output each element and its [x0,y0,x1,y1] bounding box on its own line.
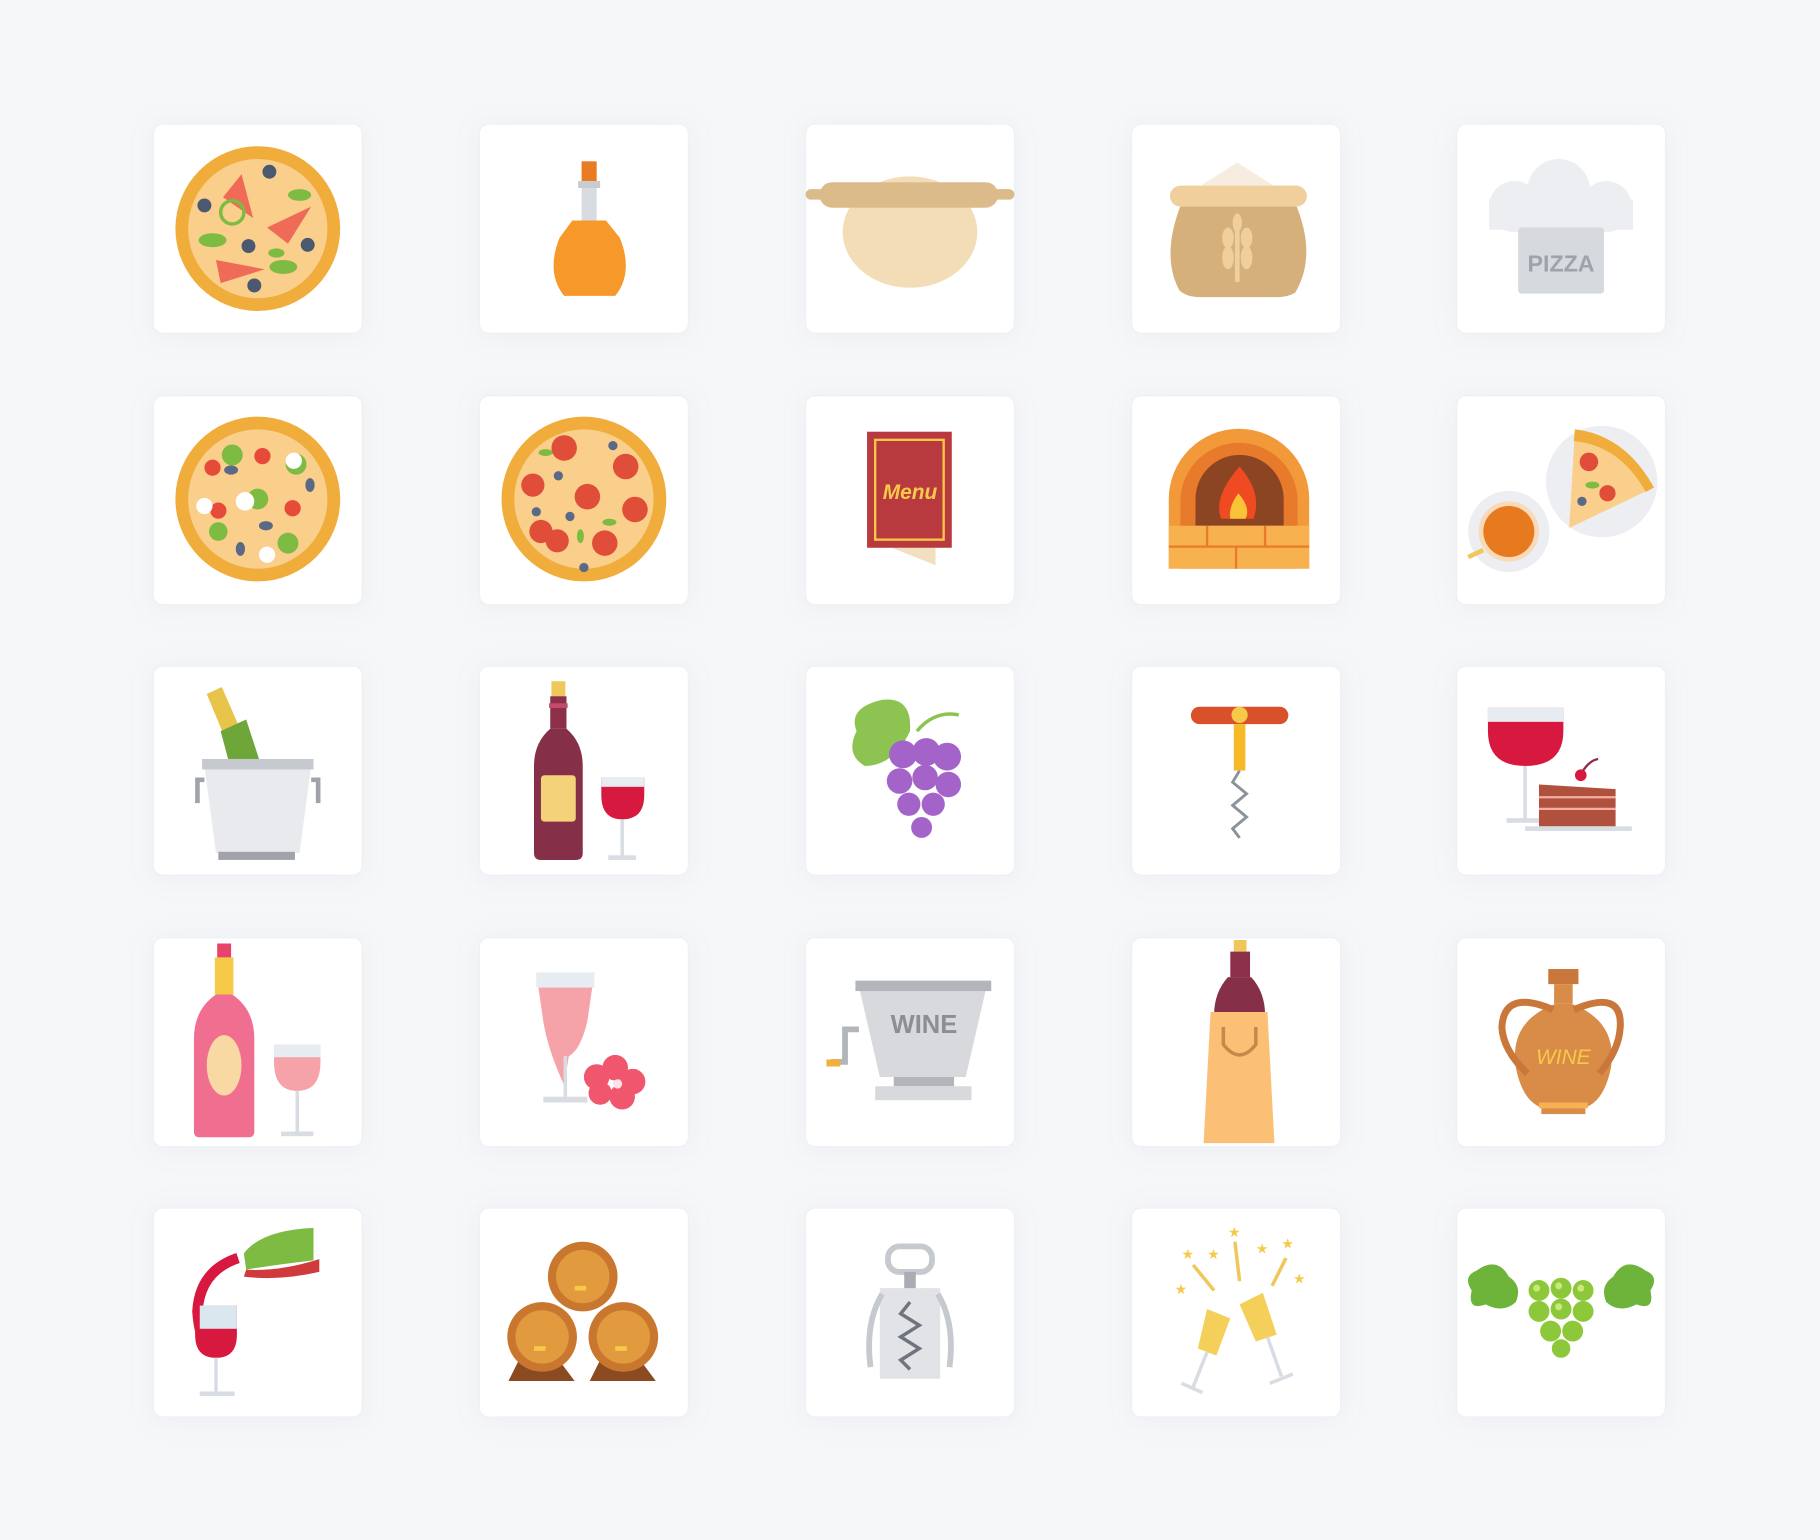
icon: rose wine glass and flower [536,973,645,1109]
icon: menu [867,432,952,565]
icon: mushroom pizza [175,417,340,581]
icon: toasting glasses [1175,1224,1305,1393]
icon: wine in paper bag [1204,940,1274,1143]
icon: wine bottle and glass [534,681,644,860]
icon: wine press [826,981,991,1100]
icon: pouring wine [195,1228,319,1396]
icon: grapes [852,699,961,838]
icon: toasting glasses: ★ [1182,1246,1194,1262]
icon: amphora [1502,969,1620,1114]
icon: rose bottle and glass [194,943,320,1137]
icon: menu: Menu [883,481,937,504]
icon: pizza oven [1169,429,1309,569]
icon: toasting glasses: ★ [1293,1271,1305,1287]
icon: oil bottle [554,161,626,296]
icon: dough and rolling pin [806,176,1014,288]
icon: chef hat: PIZZA [1528,251,1595,277]
icon: wing corkscrew [869,1246,951,1379]
icon: toasting glasses: ★ [1281,1236,1294,1252]
icon: seafood pizza [175,146,340,311]
icon: toasting glasses: ★ [1175,1281,1187,1297]
icon: green grapes with leaves [1468,1264,1654,1358]
card grid backgrounds [153,124,1665,1417]
icon: corkscrew [1191,707,1288,838]
icon: chef hat [1489,159,1633,294]
icon: amphora: WINE [1536,1046,1592,1069]
icon: wine press: WINE [891,1011,957,1039]
icon: champagne bucket [197,687,318,860]
icon: toasting glasses: ★ [1256,1240,1268,1256]
icon: toasting glasses: ★ [1228,1224,1240,1240]
icon: pizza slice and drink [1468,426,1657,572]
icon: toasting glasses: ★ [1207,1246,1220,1262]
icon: pepperoni pizza [501,417,666,581]
icon: flour sack [1170,162,1307,297]
icon: wine and cake [1488,708,1632,831]
icon: wine barrels [507,1242,658,1381]
